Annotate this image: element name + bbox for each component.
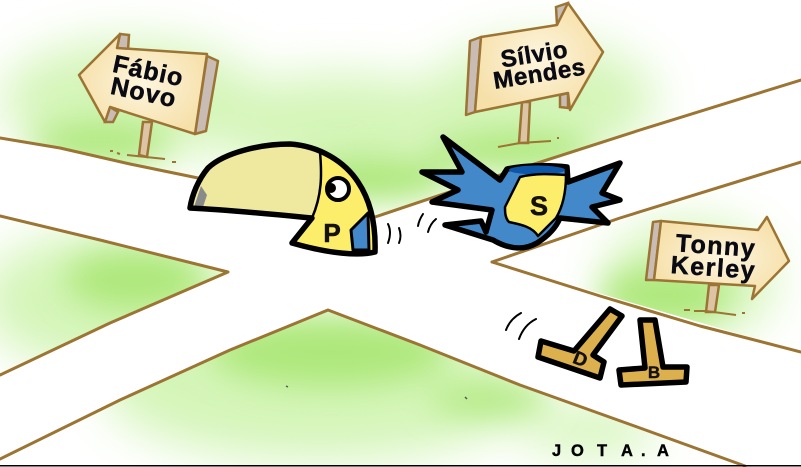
- letter D: D: [570, 348, 590, 372]
- letter B: B: [648, 363, 660, 382]
- sign: Sílvio Mendes: [466, 3, 603, 147]
- bottom border: [0, 465, 801, 466]
- label: Tonny Kerley: Tonny: [675, 229, 757, 263]
- motion lines: toucan: [388, 214, 436, 243]
- blue bird S: [422, 137, 620, 248]
- label: Fábio Novo: Novo: [108, 72, 179, 113]
- label: Sílvio Mendes: Sílvio: [499, 36, 570, 73]
- hammer D: [538, 309, 622, 378]
- specks: [286, 386, 467, 399]
- signature: JOTA.A: [552, 442, 669, 460]
- hammer B: [619, 320, 687, 385]
- toucan eye: [326, 178, 349, 200]
- motion lines: hammers: [506, 313, 536, 339]
- sign: Tonny Kerley: [646, 217, 789, 315]
- label: Fábio Novo: Fábio: [110, 50, 186, 92]
- letter S: S: [530, 191, 548, 221]
- label: Tonny Kerley: Kerley: [670, 251, 757, 285]
- letter P: P: [323, 218, 341, 248]
- label: Sílvio Mendes: Mendes: [491, 54, 587, 95]
- toucan head P: [190, 144, 375, 254]
- sign: Fábio Novo: [79, 34, 218, 162]
